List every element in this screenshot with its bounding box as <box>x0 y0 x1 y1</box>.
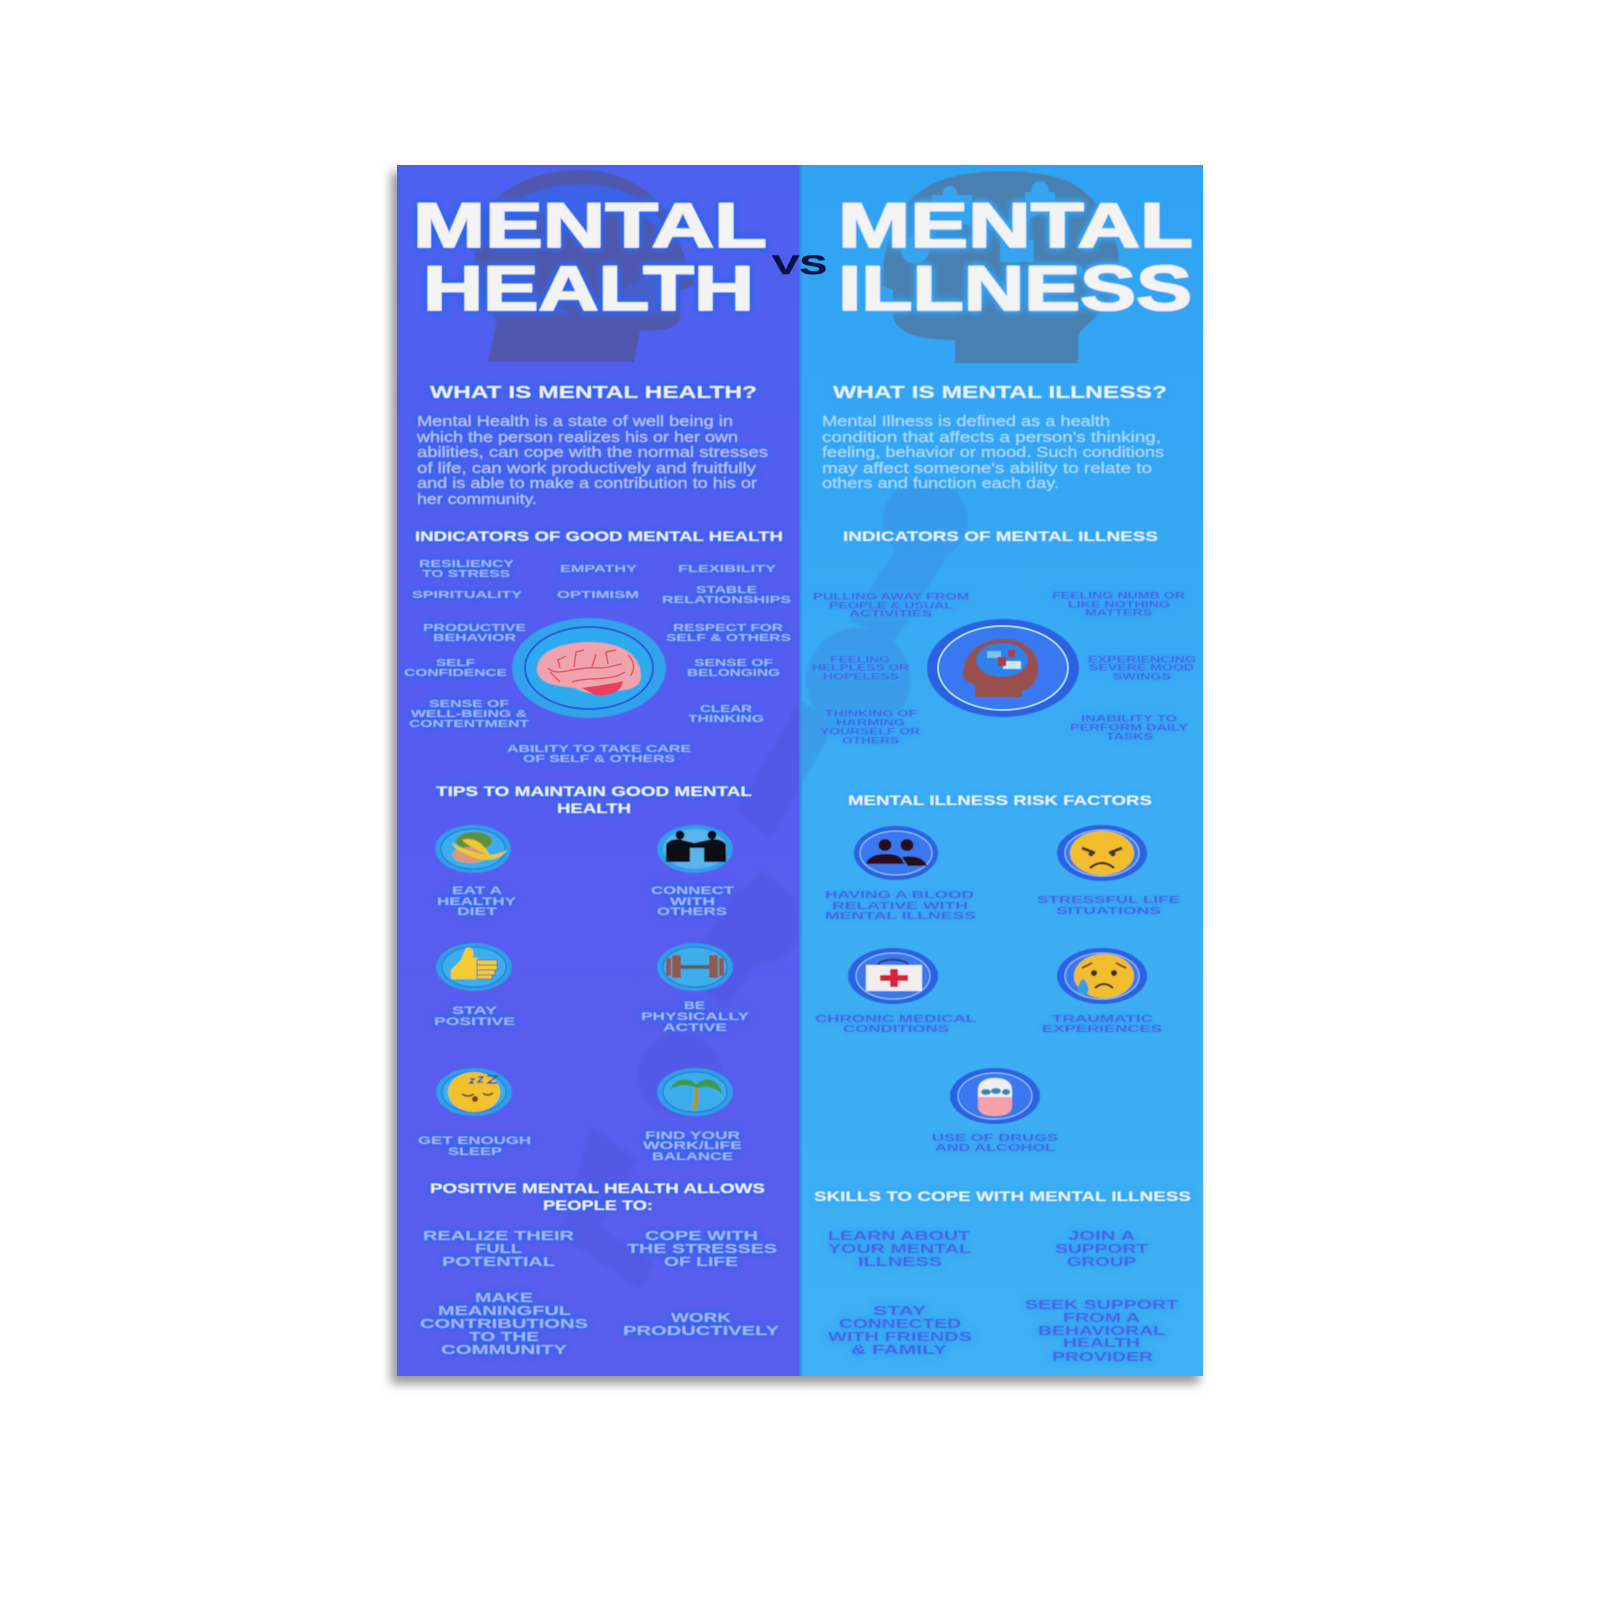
list: good mental health indicators: WELL-BEING & <box>411 708 528 720</box>
labels: tips to maintain good mental health: DIET <box>457 906 497 918</box>
labels: tips to maintain good mental health: SLEEP <box>448 1146 502 1158</box>
list: good mental health indicators: STABLE <box>696 584 757 596</box>
list: good mental health indicators: THINKING <box>688 713 764 725</box>
title: mental illness <box>838 191 1193 324</box>
heading: risk factors: MENTAL ILLNESS RISK FACTORS <box>848 792 1152 808</box>
list: positive mental health outcomes: FULL <box>475 1241 522 1256</box>
labels: tips to maintain good mental health: FIND YOUR <box>645 1130 740 1142</box>
list: good mental health indicators: OPTIMISM <box>557 589 639 601</box>
icon: healthy diet <box>435 825 511 873</box>
list: mental illness indicators: EXPERIENCING <box>1088 654 1196 666</box>
list: good mental health indicators: SPIRITUALITY <box>412 589 522 601</box>
text: mental health definition <box>416 414 768 508</box>
list: positive mental health outcomes: COPE WITH <box>645 1228 758 1243</box>
text: mental health definition: her community. <box>417 492 537 508</box>
heading: what is mental health: WHAT IS MENTAL HEALTH? <box>430 382 757 402</box>
list: coping skills: PROVIDER <box>1052 1349 1154 1364</box>
labels: risk factors: CHRONIC MEDICAL <box>815 1013 977 1025</box>
text: mental health definition: abilities, can cope with the normal stresses <box>417 445 768 461</box>
title: mental health: MENTAL <box>413 191 767 261</box>
list: mental illness indicators: MATTERS <box>1085 608 1152 618</box>
labels: tips to maintain good mental health: WORK/LIFE <box>643 1140 742 1152</box>
labels: tips to maintain good mental health: GET ENOUGH <box>418 1135 531 1147</box>
icon: sad face <box>1057 948 1147 1004</box>
list: positive mental health outcomes: MEANINGFUL <box>438 1303 571 1318</box>
title: mental health: HEALTH <box>423 254 754 324</box>
list: positive mental health outcomes: WORK <box>671 1310 732 1325</box>
title: mental illness: ILLNESS <box>838 254 1192 324</box>
heading: positive mental health allows people to: POSITIVE MENTAL HEALTH ALLOWS <box>430 1180 765 1196</box>
labels: tips to maintain good mental health: HEALTHY <box>437 896 517 908</box>
poster shadow <box>391 172 1199 1384</box>
list: mental illness indicators: SWINGS <box>1113 672 1171 682</box>
list: positive mental health outcomes: POTENTIAL <box>442 1254 555 1269</box>
labels: tips to maintain good mental health <box>418 885 750 1163</box>
heading: tips to maintain good mental health: HEALTH <box>557 800 631 816</box>
labels: risk factors: CONDITIONS <box>843 1023 949 1035</box>
text: mental illness definition: feeling, behavior or mood. Such conditions <box>822 445 1164 461</box>
icon: connect with others <box>657 825 733 873</box>
heading: positive mental health allows people to: PEOPLE TO: <box>543 1197 653 1213</box>
labels: tips to maintain good mental health: BALANCE <box>652 1151 733 1163</box>
text: mental illness definition: others and function each day. <box>822 476 1059 492</box>
text: mental illness definition: may affect someone's ability to relate to <box>822 461 1152 477</box>
list: good mental health indicators: SENSE OF <box>429 698 510 710</box>
list: mental illness indicators: YOURSELF OR <box>820 726 920 738</box>
heading: skills to cope: SKILLS TO COPE WITH MENTAL ILLNESS <box>814 1188 1191 1204</box>
list: mental illness indicators: FEELING NUMB OR <box>1052 590 1185 602</box>
labels: risk factors: AND ALCOHOL <box>935 1142 1056 1154</box>
list: positive mental health outcomes: REALIZE THEIR <box>423 1228 575 1243</box>
icon: medical kit <box>848 948 938 1004</box>
list: good mental health indicators: BEHAVIOR <box>433 632 517 644</box>
list: good mental health indicators: FLEXIBILITY <box>678 563 776 575</box>
list: good mental health indicators: RESILIENCY <box>419 558 514 570</box>
heading: tips to maintain good mental health: TIPS TO MAINTAIN GOOD MENTAL <box>436 783 753 799</box>
labels: tips to maintain good mental health: PHYSICALLY <box>641 1011 750 1023</box>
icon: mental illness head with puzzle pieces <box>880 171 1119 363</box>
list: coping skills <box>828 1228 1178 1364</box>
list: positive mental health outcomes: TO THE <box>469 1329 539 1344</box>
list: coping skills: & FAMILY <box>851 1342 948 1357</box>
list: good mental health indicators: CONTENTMENT <box>409 718 530 730</box>
list: mental illness indicators: THINKING OF <box>825 708 917 720</box>
heading: tips to maintain good mental health <box>436 783 753 816</box>
list: mental illness indicators: SEVERE MOOD <box>1089 662 1194 674</box>
list: mental illness indicators: PERFORM DAILY <box>1070 722 1189 734</box>
list: mental illness indicators: HELPLESS OR <box>812 662 909 674</box>
icon: head with puzzle in circle <box>927 619 1079 717</box>
list: positive mental health outcomes <box>420 1228 779 1357</box>
list: good mental health indicators: SENSE OF <box>694 657 774 669</box>
heading: indicators of good mental health: INDICATORS OF GOOD MENTAL HEALTH <box>415 528 783 544</box>
list: mental illness indicators: INABILITY TO <box>1081 714 1177 724</box>
list: good mental health indicators: EMPATHY <box>560 563 637 575</box>
list: coping skills: JOIN A <box>1068 1228 1136 1243</box>
labels: tips to maintain good mental health: WITH <box>670 896 715 908</box>
list: coping skills: GROUP <box>1067 1254 1136 1269</box>
list: mental illness indicators: FEELING <box>830 654 890 666</box>
labels: tips to maintain good mental health: OTHERS <box>657 906 727 918</box>
text: mental health definition: which the person realizes his or her own <box>416 430 738 446</box>
list: good mental health indicators: PRODUCTIVE <box>423 622 526 634</box>
list: mental illness indicators: HOPELESS <box>823 672 899 682</box>
list: coping skills: HEALTH <box>1063 1335 1140 1350</box>
labels: risk factors: RELATIVE WITH <box>832 900 968 912</box>
list: positive mental health outcomes: COMMUNITY <box>441 1342 567 1357</box>
heading: what is mental illness: WHAT IS MENTAL ILLNESS? <box>833 382 1167 402</box>
list: good mental health indicators: RESPECT FOR <box>673 622 784 634</box>
list: mental illness indicators: PULLING AWAY FROM <box>813 592 969 602</box>
labels: risk factors: USE OF DRUGS <box>932 1132 1058 1144</box>
list: mental illness indicators <box>812 590 1196 746</box>
labels: risk factors: SITUATIONS <box>1056 905 1161 917</box>
icon: mental health head silhouette <box>475 170 695 362</box>
list: coping skills: SEEK SUPPORT <box>1025 1297 1178 1312</box>
labels: risk factors: MENTAL ILLNESS <box>825 910 976 922</box>
title: mental illness: MENTAL <box>838 191 1193 261</box>
list: coping skills: WITH FRIENDS <box>828 1329 972 1344</box>
list: mental illness indicators: TASKS <box>1106 732 1153 742</box>
panel: mental health background <box>397 165 800 1376</box>
icon: brain in circle <box>512 618 666 718</box>
list: mental illness indicators: PEOPLE & USUAL <box>829 600 953 612</box>
list: good mental health indicators: TO STRESS <box>422 568 510 580</box>
list: positive mental health outcomes: MAKE <box>475 1290 533 1305</box>
icon: pill capsule <box>950 1068 1040 1124</box>
heading: positive mental health allows people to <box>430 1180 765 1213</box>
list: coping skills: FROM A <box>1063 1310 1141 1325</box>
list: coping skills: BEHAVIORAL <box>1038 1323 1165 1338</box>
list: good mental health indicators: CONFIDENCE <box>404 667 507 679</box>
text: mental health definition: of life, can work productively and fruitfully <box>417 461 757 477</box>
text: mental health definition: Mental Health is a state of well being in <box>417 414 733 430</box>
list: coping skills: LEARN ABOUT <box>828 1228 970 1243</box>
vs label: VS <box>772 250 827 280</box>
list: coping skills: ILLNESS <box>858 1254 942 1269</box>
divider line <box>799 165 802 1376</box>
text: mental illness definition: Mental Illness is defined as a health <box>822 414 1110 430</box>
icon: angry face <box>1057 825 1147 881</box>
labels: risk factors: STRESSFUL LIFE <box>1037 894 1180 906</box>
list: positive mental health outcomes: PRODUCTIVELY <box>623 1323 779 1338</box>
text: mental illness definition <box>822 414 1164 492</box>
labels: tips to maintain good mental health: EAT A <box>452 885 502 897</box>
list: mental illness indicators: OTHERS <box>842 736 899 746</box>
list: positive mental health outcomes: THE STRESSES <box>627 1241 777 1256</box>
list: mental illness indicators: ACTIVITIES <box>849 608 932 620</box>
text: mental illness definition: condition that affects a person's thinking, <box>822 430 1161 446</box>
list: good mental health indicators <box>404 558 791 765</box>
heading: indicators of mental illness: INDICATORS OF MENTAL ILLNESS <box>843 528 1158 544</box>
panel: mental illness background <box>800 165 1203 1376</box>
list: good mental health indicators: SELF & OTHERS <box>666 632 791 644</box>
watermark band <box>560 478 967 1290</box>
title: mental health <box>413 191 767 324</box>
list: positive mental health outcomes: CONTRIBUTIONS <box>420 1316 588 1331</box>
labels: risk factors: HAVING A BLOOD <box>825 889 975 901</box>
list: good mental health indicators: ABILITY TO TAKE CARE <box>507 743 691 755</box>
text: mental health definition: and is able to make a contribution to his or <box>417 476 757 492</box>
list: coping skills: YOUR MENTAL <box>828 1241 971 1256</box>
labels: risk factors: TRAUMATIC <box>1052 1013 1154 1025</box>
labels: tips to maintain good mental health: BE <box>684 1000 705 1012</box>
list: good mental health indicators: RELATIONSHIPS <box>662 594 791 606</box>
labels: tips to maintain good mental health: CONNECT <box>651 885 734 897</box>
list: coping skills: STAY <box>873 1303 927 1318</box>
labels: tips to maintain good mental health: POSITIVE <box>434 1016 515 1028</box>
labels: risk factors <box>815 889 1180 1154</box>
labels: tips to maintain good mental health: ACTIVE <box>663 1022 727 1034</box>
list: good mental health indicators: CLEAR <box>700 703 753 715</box>
list: mental illness indicators: LIKE NOTHING <box>1068 600 1170 610</box>
icon: thumbs up <box>436 943 512 991</box>
icon: palm tree <box>657 1068 733 1116</box>
list: mental illness indicators: HARMING <box>836 718 905 728</box>
list: good mental health indicators: SELF <box>436 657 476 669</box>
list: coping skills: CONNECTED <box>839 1316 961 1331</box>
icon: dumbbell <box>657 943 733 991</box>
labels: tips to maintain good mental health: STAY <box>452 1005 498 1017</box>
list: good mental health indicators: BELONGING <box>687 667 780 679</box>
labels: risk factors: EXPERIENCES <box>1042 1023 1162 1035</box>
icon: blood relatives <box>854 826 938 880</box>
list: positive mental health outcomes: OF LIFE <box>664 1254 738 1269</box>
list: coping skills: SUPPORT <box>1055 1241 1148 1256</box>
list: good mental health indicators: OF SELF & OTHERS <box>523 753 675 765</box>
icon: sleeping face <box>436 1068 512 1116</box>
